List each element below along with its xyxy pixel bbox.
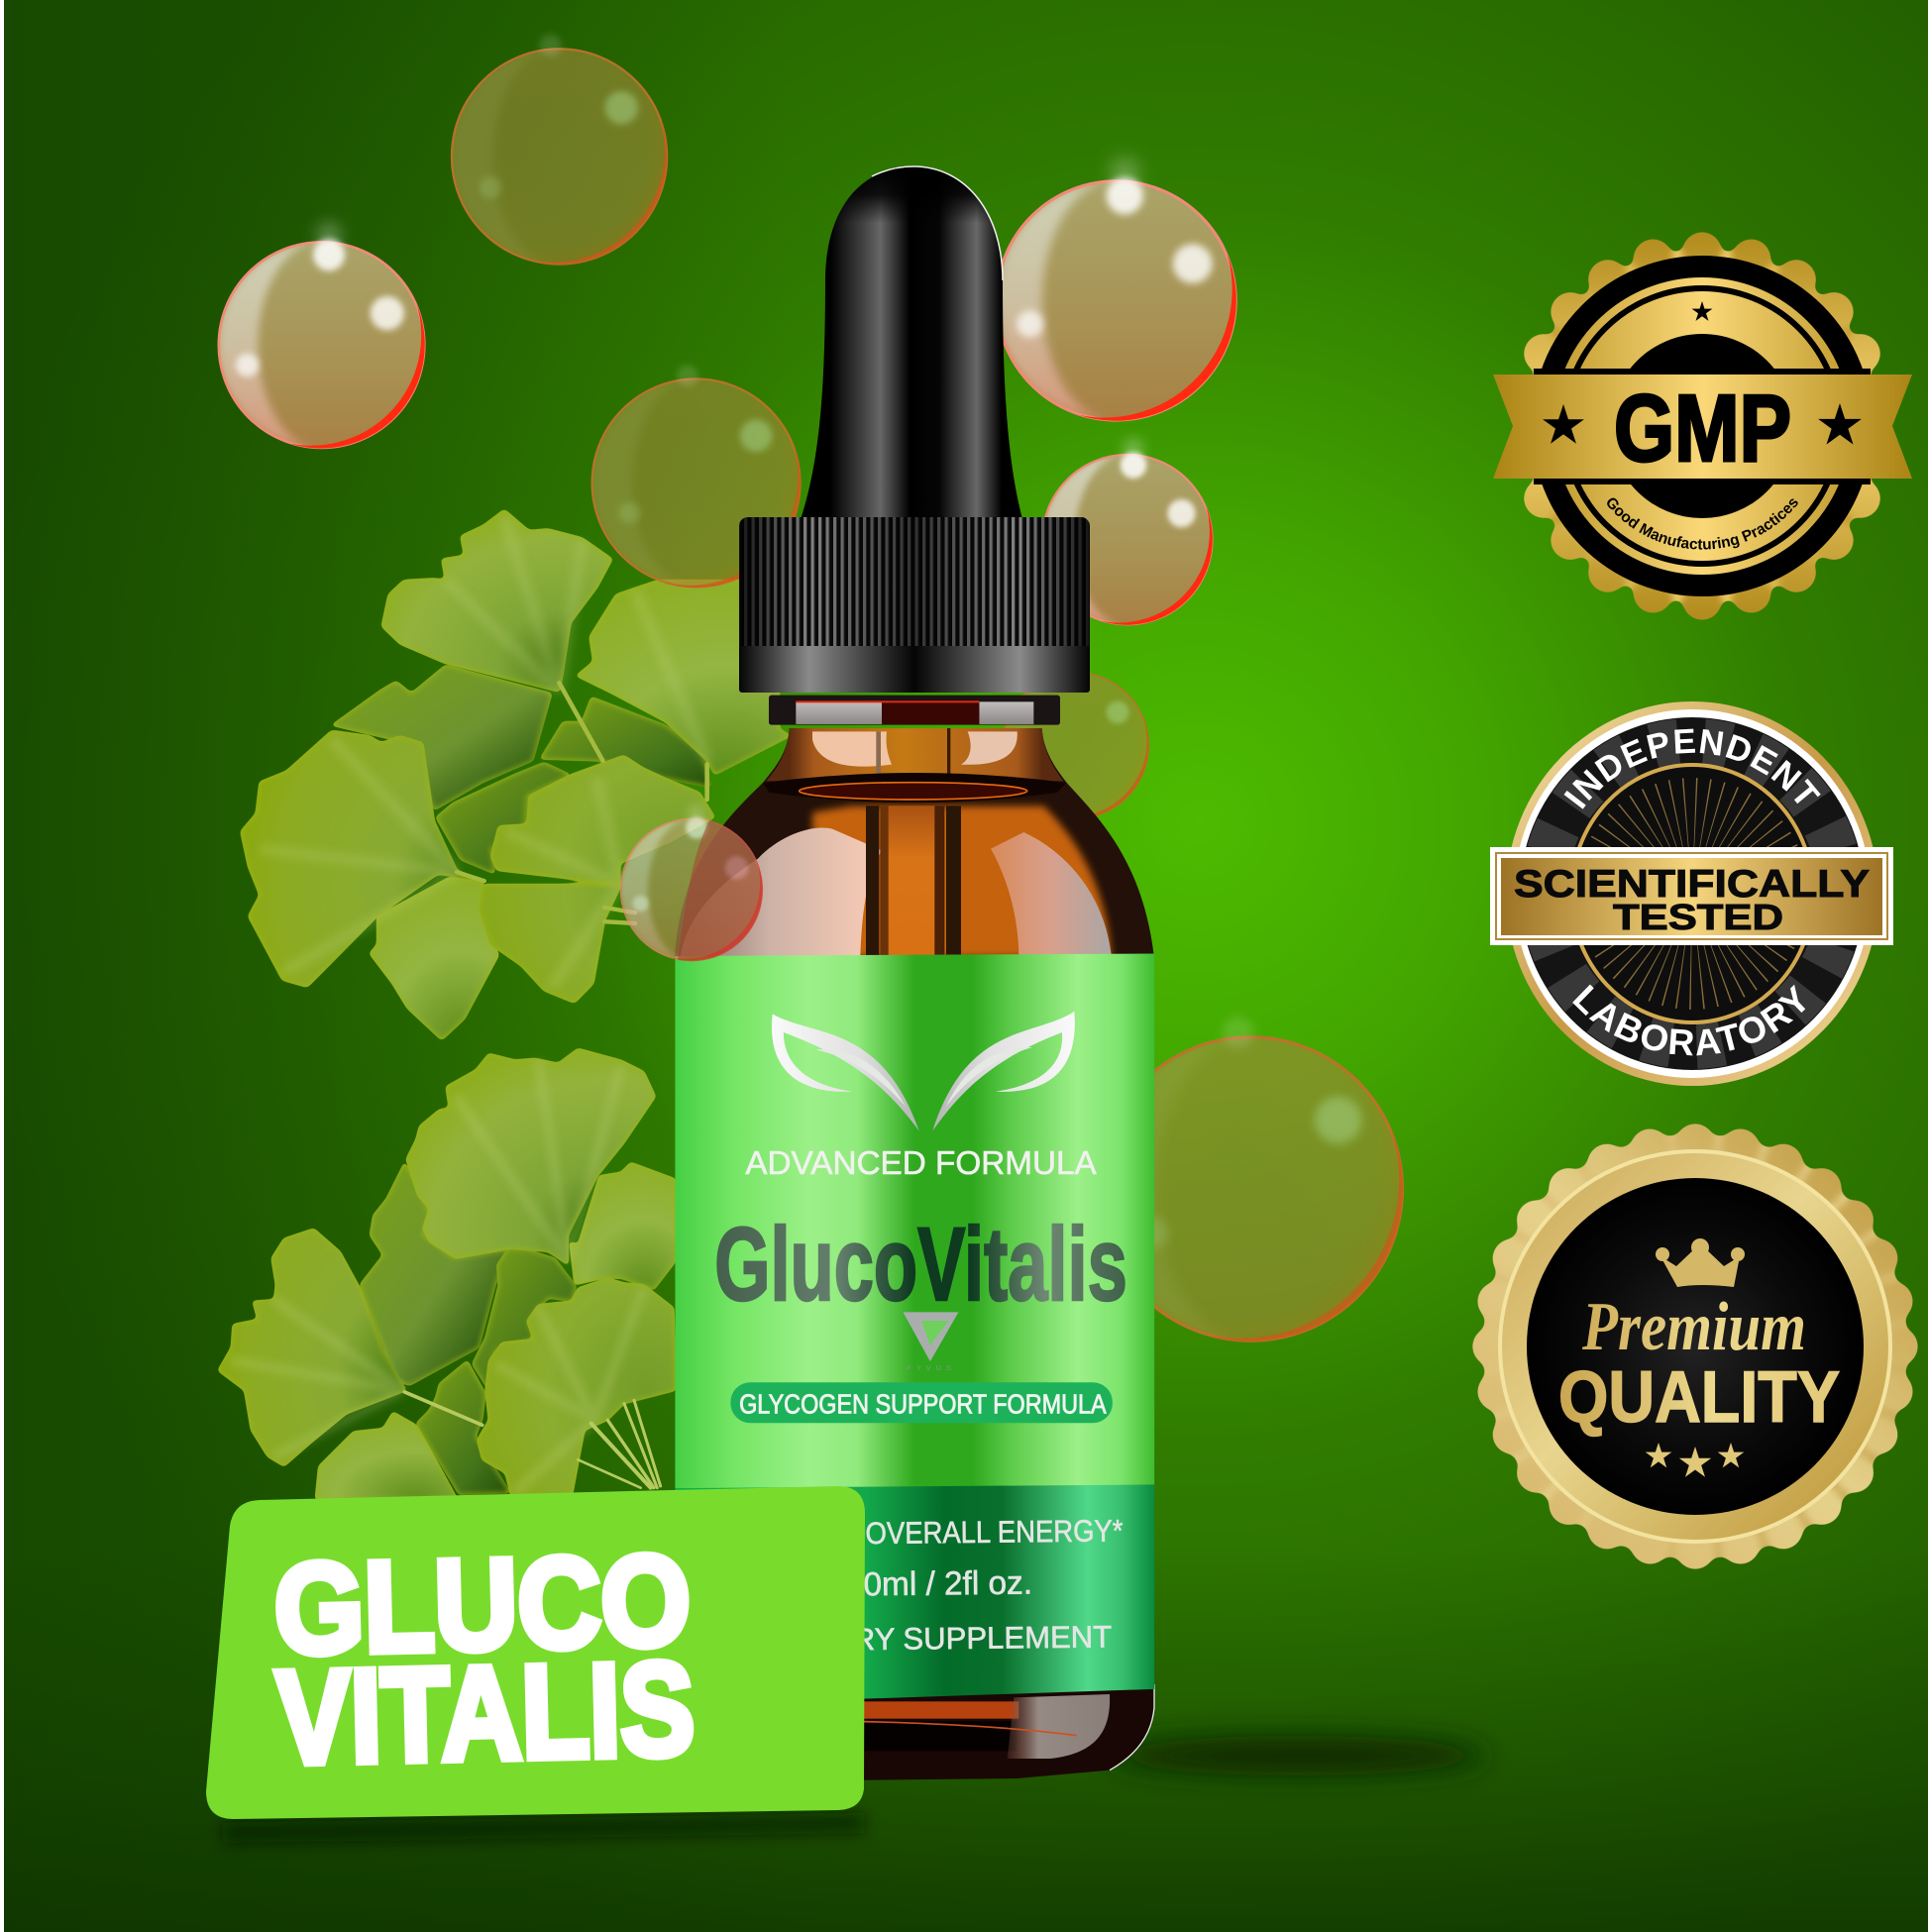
base reflection (1008, 1694, 1110, 1759)
label: lower text (763, 1513, 1125, 1658)
leaf: bottom left (315, 1412, 458, 1499)
leaf: back right (540, 697, 711, 788)
neck ring (769, 696, 1060, 725)
bubble: left (218, 222, 425, 449)
band behind ribbon (1534, 369, 1871, 484)
ginkgo leaves: upper cluster (241, 509, 791, 1040)
label: brand mark (903, 1312, 958, 1372)
label: formula pill: GLYCOGEN SUPPORT FORMULA (739, 1388, 1107, 1419)
ribbon (1493, 375, 1912, 479)
bottle glass (675, 696, 1154, 958)
quality text: QUALITY (1558, 1357, 1840, 1438)
dropper bulb (801, 166, 1022, 519)
brand card: vitalis: VITALIS (274, 1635, 696, 1792)
curved text: laboratory: LABORATORY (1572, 985, 1805, 1056)
outer rings (1506, 701, 1878, 1086)
leaf: top (381, 509, 612, 692)
leaf: front center (480, 755, 714, 1003)
brand card: gluco: GLUCO (272, 1528, 693, 1681)
product bottle (739, 166, 1090, 693)
label: advanced formula: ADVANCED FORMULA (745, 1145, 1097, 1182)
bubble: right of cap (1041, 438, 1213, 625)
gold ring (1500, 1151, 1890, 1542)
rings (1543, 267, 1862, 586)
banner text: scientifically: SCIENTIFICALLY (1514, 863, 1870, 906)
leaf veins (260, 516, 707, 987)
stems (404, 1392, 661, 1488)
three stars (1646, 1443, 1744, 1477)
amber neck (766, 728, 1063, 781)
burst edge (1526, 250, 1878, 602)
bubble: large right (1097, 1017, 1404, 1342)
card shadow (223, 1813, 864, 1843)
label: lower text: 60ml / 2fl oz. (845, 1565, 1032, 1604)
left star (1543, 404, 1584, 444)
leaf: back mid (360, 1162, 508, 1385)
ring segments (1544, 741, 1841, 1046)
scalloped edge (1483, 1134, 1907, 1558)
banner text: tested: TESTED (1613, 897, 1783, 937)
label: upper panel (675, 953, 1154, 1488)
premium script: Premium (1581, 1289, 1806, 1365)
leaf: center dark (436, 763, 571, 874)
label: leaf logo (772, 1012, 1075, 1131)
badge: scientifically tested (1490, 701, 1893, 1086)
leaf: top large (406, 1048, 656, 1265)
label: lower text: OVERALL ENERGY* (865, 1513, 1124, 1551)
brand card (206, 1486, 865, 1819)
badge: GMP (1493, 232, 1912, 620)
leaf: center small back (416, 1360, 510, 1494)
stems (457, 683, 707, 923)
GMP text: GMP (1614, 376, 1791, 482)
curved text: independent: INDEPENDENT (1563, 729, 1821, 809)
badge: premium quality (1483, 1134, 1907, 1558)
leaf: back right (570, 1162, 676, 1290)
ribbed cap (739, 517, 1090, 693)
leaf: right large (577, 581, 791, 775)
bottle shadow (1110, 1736, 1486, 1775)
label: brand mark: FYVUS (907, 1363, 956, 1372)
amber center (812, 805, 1112, 958)
leaf: center dark (473, 1248, 577, 1390)
label: formula pill (730, 1382, 1113, 1423)
base amber line (720, 1721, 1077, 1736)
bubbles behind bottle (218, 35, 1404, 1342)
bubble: upper middle (591, 365, 802, 588)
bottle base (720, 1684, 1154, 1781)
band reflection (800, 783, 1027, 800)
bubble: top (451, 35, 668, 266)
black center (1527, 1178, 1864, 1515)
base outline (1110, 1684, 1154, 1771)
base amber strip (720, 1701, 1018, 1719)
leaf: back upper (332, 665, 552, 810)
bubble: front of bottle (620, 805, 763, 961)
left pale panel (681, 828, 882, 958)
product label (675, 953, 1154, 1705)
banner (1490, 847, 1893, 945)
crown (1656, 1238, 1745, 1287)
leaf: lower left back (370, 878, 498, 1040)
curved text: Good Manufacturing Practices (1607, 497, 1798, 550)
dark shoulder band (763, 773, 1067, 803)
bubble: right of bottle lower (1002, 663, 1149, 819)
leaf: front (478, 1278, 676, 1499)
leaf: big left (241, 730, 483, 987)
center with rays (1571, 765, 1813, 1022)
top star (1692, 301, 1712, 321)
right star (1818, 403, 1862, 445)
leaf: big left (218, 1229, 406, 1466)
bubble: large upper right (996, 158, 1236, 421)
ginkgo leaves: lower cluster (218, 1048, 676, 1499)
label: lower panel (675, 1484, 1154, 1705)
glass body (675, 728, 1154, 958)
neck highlights (812, 728, 1018, 775)
label: product name: GlucoVitalis (714, 1207, 1127, 1323)
central amber column (889, 805, 934, 958)
base black pool (720, 1721, 1018, 1751)
leaf veins (231, 1060, 644, 1493)
label: lower text: DIETARY SUPPLEMENT (764, 1619, 1112, 1658)
dark vertical stripes (866, 805, 961, 958)
right pale panel (991, 832, 1112, 958)
